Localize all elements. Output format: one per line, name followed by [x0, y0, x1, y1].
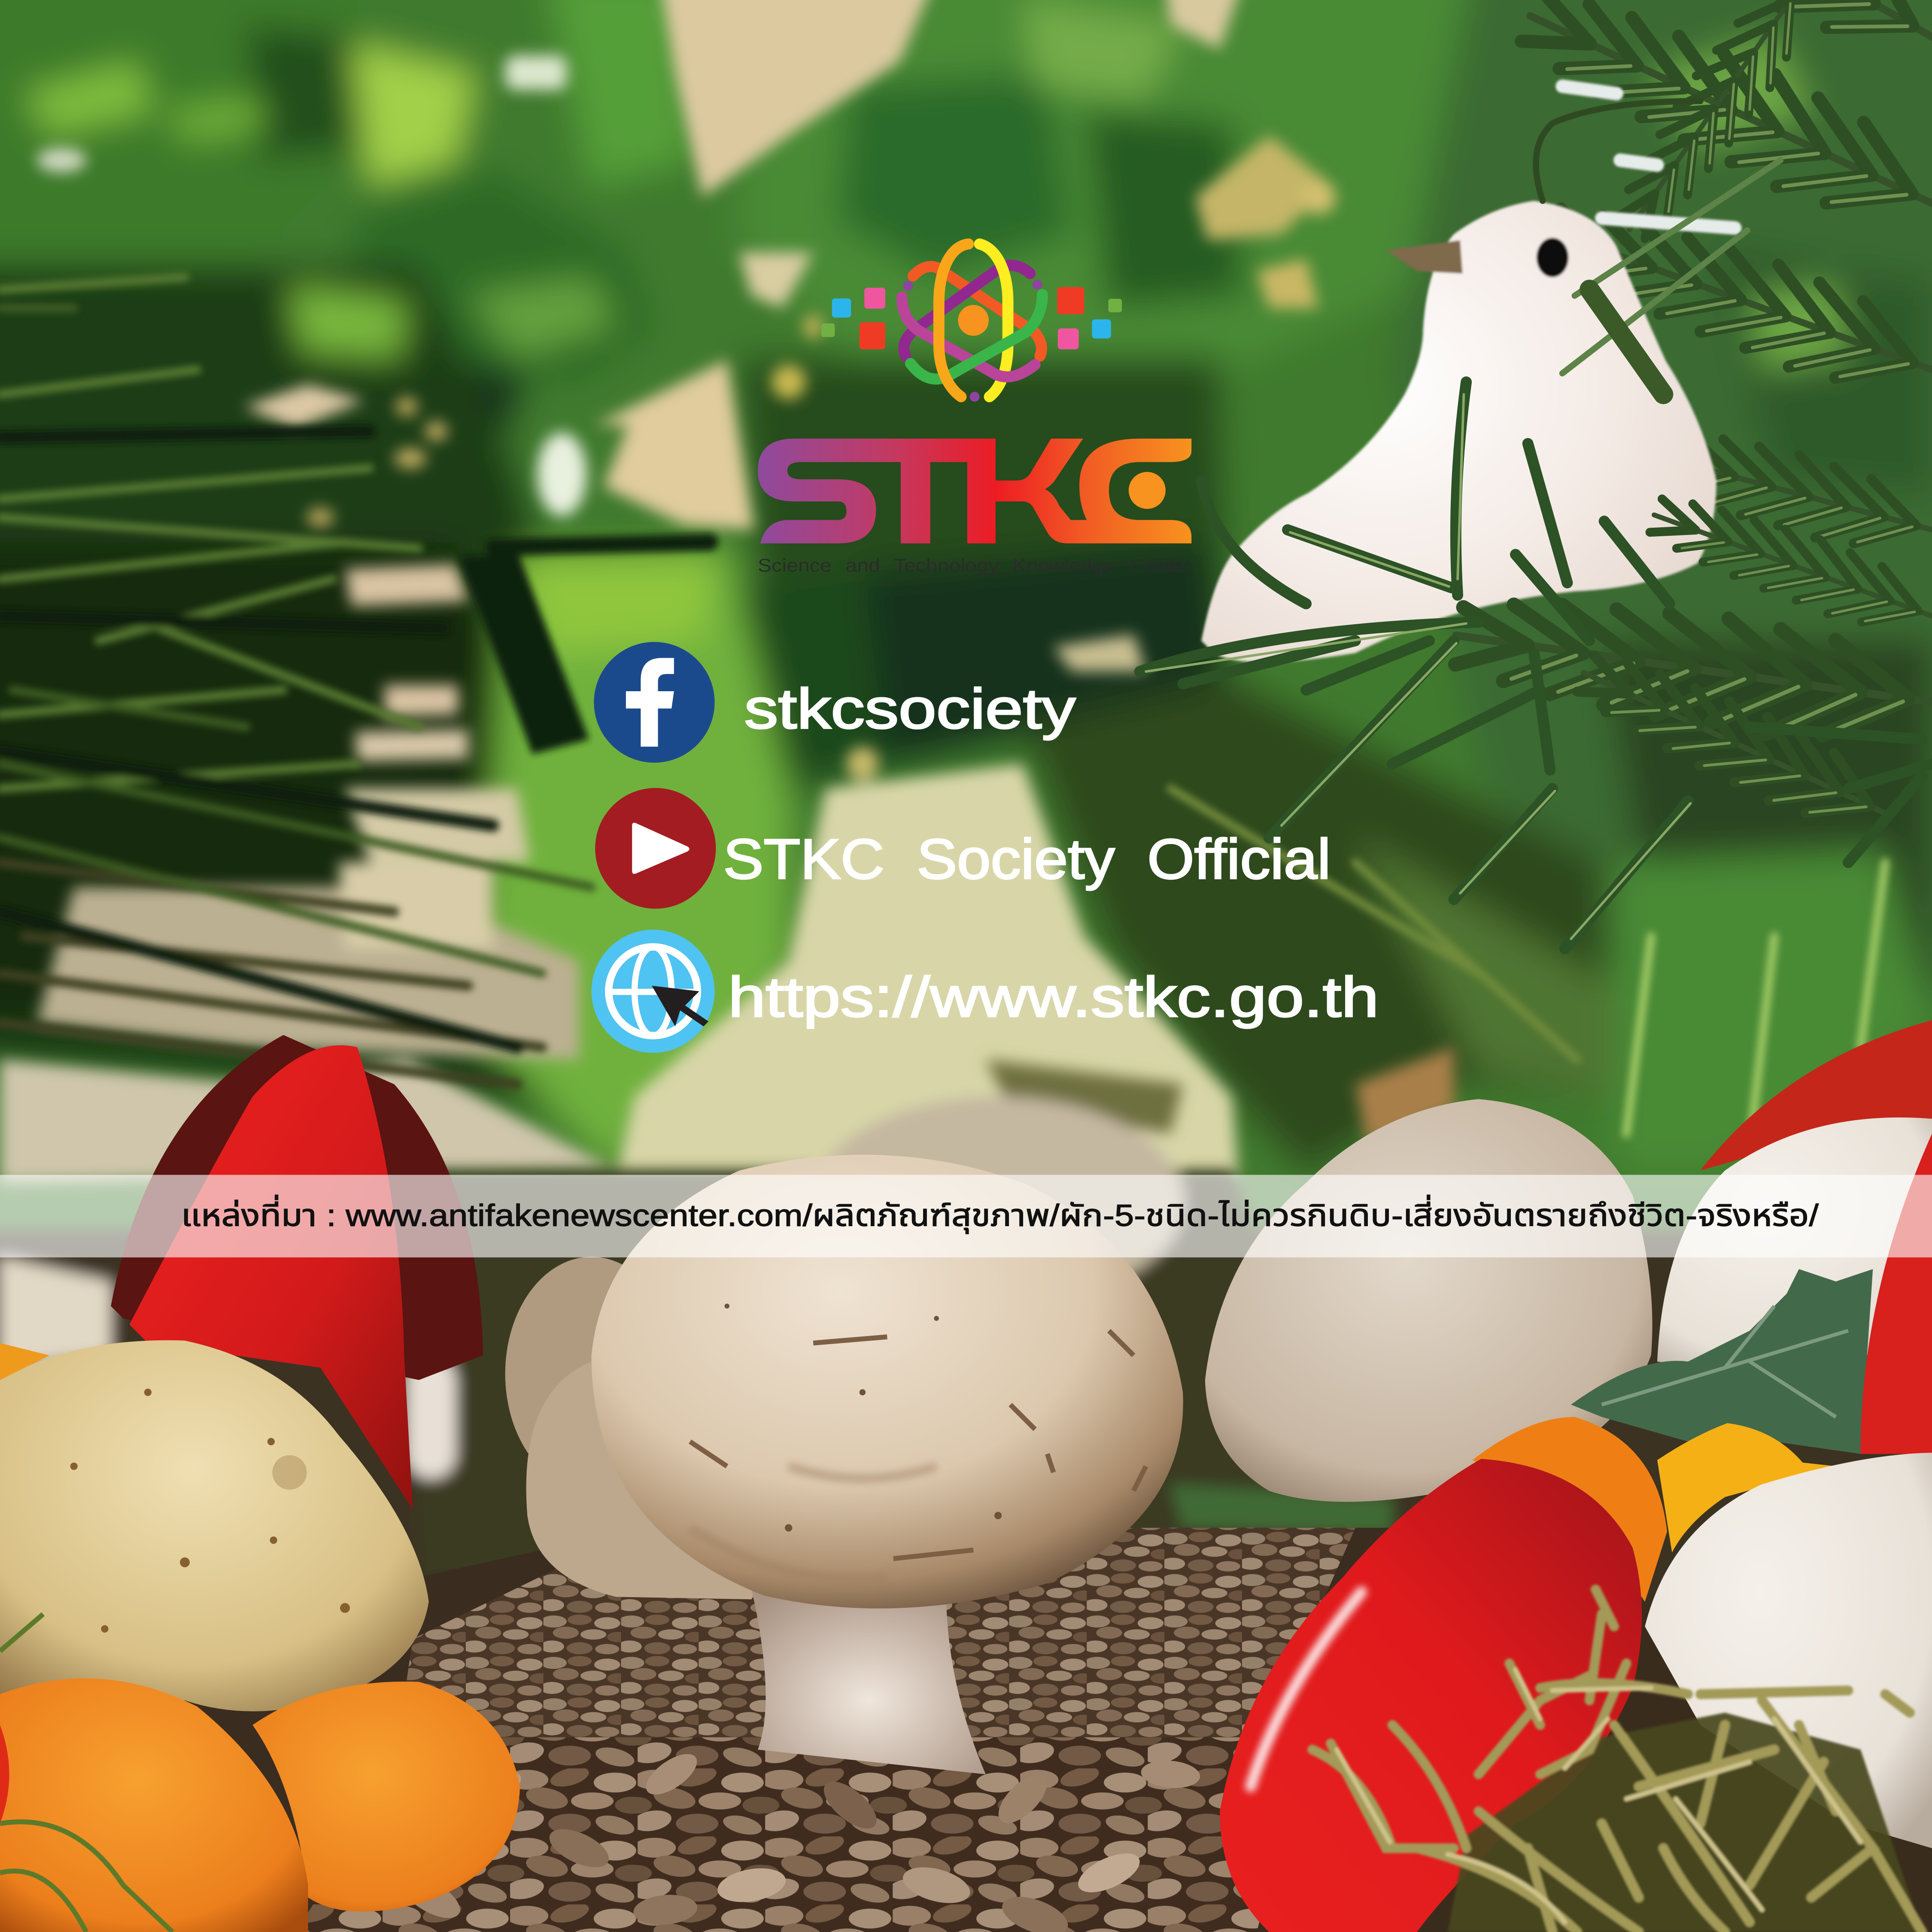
moss lower left	[0, 1614, 173, 1932]
scattered large lentils	[396, 1746, 1201, 1932]
red pepper lower right	[1220, 1459, 1642, 1932]
dove	[1201, 201, 1716, 662]
orange pepper	[1473, 1417, 1667, 1602]
back mushrooms	[505, 1257, 764, 1599]
lower backdrop	[0, 1047, 1932, 1602]
social: website row	[592, 930, 1379, 1053]
white mushroom right	[1657, 1118, 1932, 1368]
dark red pepper behind	[111, 1035, 483, 1380]
social: facebook row	[594, 642, 1075, 762]
red pepper far right	[1861, 1133, 1932, 1454]
logo particles	[821, 279, 1122, 402]
rosemary front needles	[1140, 382, 1932, 949]
social: youtube row	[595, 788, 1331, 909]
main mushroom	[592, 1155, 1183, 1774]
logo: STKC	[758, 244, 1191, 576]
icon: globe with cursor	[592, 930, 715, 1053]
rocket leaf	[1571, 1269, 1873, 1454]
white mushroom lower right	[1645, 1453, 1932, 1848]
source text: แหล่งที่มา : www.antifakenewscenter.com/ผลิตภัณฑ์สุขภาพ/ผัก-5-ชนิด-ไม่ควรกินดิบ-เสี่ยงอันตรายถึงชีวิต-จริงหรือ/	[181, 1195, 1819, 1234]
yellow pepper	[1657, 1423, 1836, 1552]
moss lower right	[1312, 1589, 1922, 1932]
beige light patches	[0, 0, 1336, 1183]
source band	[0, 1175, 1932, 1258]
logo centre dot	[958, 305, 989, 336]
red pepper left	[129, 1045, 413, 1510]
rosemary sprigs behind dove	[1509, 0, 1932, 566]
red vegetable top right	[1700, 1020, 1932, 1170]
logo tagline: Science and Technology Knowledge Center	[758, 556, 1191, 576]
logo wordmark	[758, 439, 1191, 544]
potato left	[0, 1340, 429, 1711]
lentil floor	[0, 1528, 1392, 1932]
icon: youtube	[595, 788, 716, 909]
icon: facebook	[594, 642, 715, 762]
right mushroom	[1205, 1099, 1653, 1502]
rosemary sprigs in front	[1449, 86, 1932, 848]
facebook name: stkcsociety	[744, 677, 1075, 740]
blurred blades	[0, 277, 1885, 1146]
orange tomatoes	[0, 1343, 520, 1932]
logo emblem	[902, 244, 1042, 397]
blurred foliage backdrop	[0, 0, 1932, 1245]
youtube channel name: STKC Society Official	[723, 827, 1331, 890]
pepper highlight	[1251, 1592, 1361, 1786]
website address: https://www.stkc.go.th	[728, 965, 1379, 1029]
